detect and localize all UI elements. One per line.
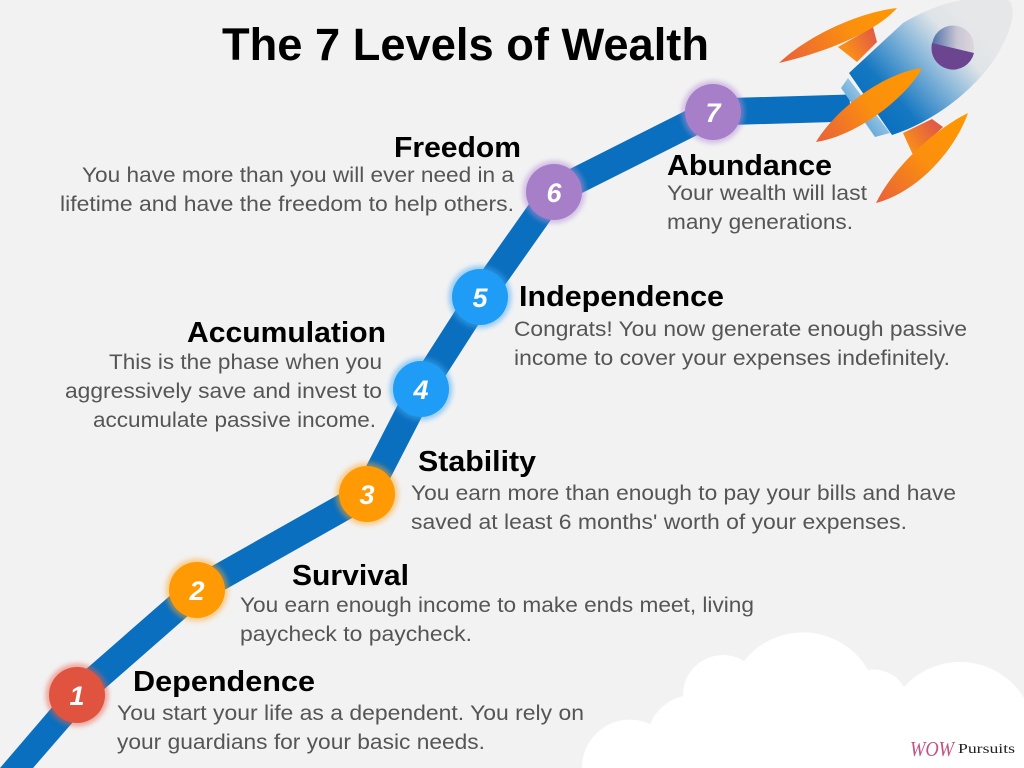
text: Survival: You earn enough income to make ends meet, living — [240, 593, 754, 617]
text: Survival — [240, 560, 754, 646]
text: Abundance: Your wealth will last — [667, 181, 867, 205]
level 6 marker: 6 — [546, 178, 562, 208]
text: Independence — [514, 281, 967, 370]
level 7 marker — [682, 80, 744, 144]
logo: WOW Pursuits — [910, 737, 1015, 761]
level 3 marker: 3 — [359, 480, 375, 510]
text: Freedom: Freedom — [394, 132, 521, 164]
level 5 marker: 5 — [472, 283, 488, 313]
text: Abundance: Abundance — [667, 150, 832, 182]
text: Stability: saved at least 6 months' worth of your expenses. — [411, 510, 907, 534]
level 3 marker — [336, 462, 398, 526]
text: Abundance: many generations. — [667, 210, 853, 234]
text: Accumulation: Accumulation — [187, 317, 386, 349]
text: Survival: paycheck to paycheck. — [240, 622, 472, 646]
text: Dependence: You start your life as a dependent. You rely on — [117, 701, 584, 725]
text: Freedom — [60, 132, 521, 216]
level 4 marker — [390, 358, 452, 420]
text: Accumulation: aggressively save and invest to — [65, 379, 382, 403]
text: Abundance — [667, 150, 867, 234]
cloud — [582, 632, 1024, 768]
title: The 7 Levels of Wealth — [222, 19, 709, 70]
logo: WOW Pursuits: WOW — [910, 737, 956, 761]
text: Stability: Stability — [418, 446, 536, 478]
level 2 marker — [166, 558, 228, 622]
text: Dependence — [117, 666, 584, 754]
text: Accumulation — [65, 317, 386, 432]
level 1 marker — [46, 664, 108, 726]
growth path — [0, 108, 850, 768]
text: Survival: Survival — [292, 560, 409, 592]
rocket icon — [779, 0, 1013, 203]
text: Independence: Independence — [519, 281, 724, 313]
level 1 marker: 1 — [69, 681, 85, 711]
level 7 marker: 7 — [705, 98, 722, 128]
text: Independence: Congrats! You now generate enough passive — [514, 317, 967, 341]
level 5 marker — [448, 266, 512, 328]
text: Accumulation: accumulate passive income. — [93, 408, 376, 432]
level 6 marker — [522, 160, 586, 224]
level 4 marker: 4 — [412, 375, 429, 405]
text: Dependence: your guardians for your basic needs. — [117, 730, 485, 754]
text: Stability — [411, 446, 956, 534]
level 2 marker: 2 — [188, 576, 205, 606]
text: Stability: You earn more than enough to pay your bills and have — [411, 481, 956, 505]
text: Freedom: You have more than you will ever need in a — [82, 163, 514, 187]
text: Accumulation: This is the phase when you — [109, 350, 382, 374]
text: Independence: income to cover your expenses indefinitely. — [514, 346, 950, 370]
text: Dependence: Dependence — [133, 666, 315, 698]
logo: WOW Pursuits: Pursuits — [958, 742, 1015, 757]
text: Freedom: lifetime and have the freedom to help others. — [60, 192, 514, 216]
